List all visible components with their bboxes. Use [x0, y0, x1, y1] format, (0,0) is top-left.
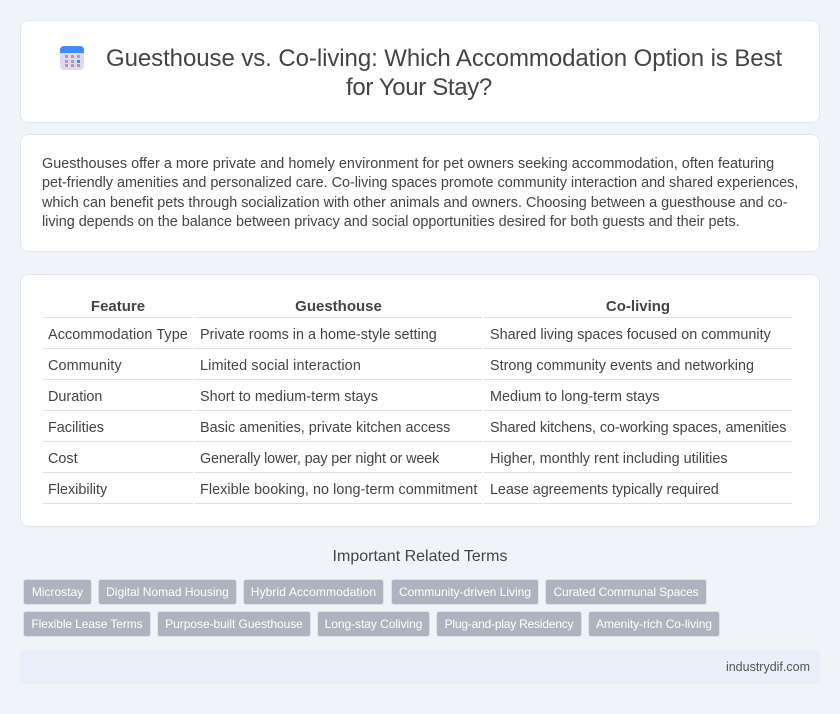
related terms tags: Long-stay Coliving — [325, 617, 422, 631]
comparison table: Lease agreements typically required — [490, 482, 719, 498]
related terms tags: Plug-and-play Residency — [445, 617, 573, 631]
footer bar — [20, 650, 820, 684]
header panel — [20, 20, 820, 123]
comparison table: Higher, monthly rent including utilities — [490, 451, 728, 467]
related terms tags: Curated Communal Spaces — [553, 585, 699, 599]
comparison table: Feature — [91, 298, 145, 315]
title — [106, 45, 782, 101]
intro text: living depends on the balance between privacy and social opportunities desired for both guests and their pets. — [42, 214, 740, 230]
source label: industrydif.com — [726, 660, 810, 674]
icon: calendar — [60, 46, 84, 70]
title: Guesthouse vs. Co-living: Which Accommodation Option is Best — [106, 45, 782, 72]
comparison table: Community — [48, 358, 122, 374]
comparison table: Shared kitchens, co-working spaces, amenities — [490, 420, 786, 436]
related terms tags — [23, 579, 720, 637]
comparison table: Limited social interaction — [200, 358, 361, 374]
comparison table panel — [20, 274, 820, 527]
comparison table: Flexibility — [48, 482, 107, 498]
comparison table: Co-living — [606, 298, 670, 315]
comparison table: Private rooms in a home-style setting — [200, 327, 437, 343]
intro text: pet-friendly amenities and personalized care. Co-living spaces promote community interaction and shared experiences, — [42, 175, 798, 191]
comparison table: Duration — [48, 389, 102, 405]
related terms tags: Purpose-built Guesthouse — [165, 617, 303, 631]
comparison table — [43, 298, 792, 504]
comparison table: Basic amenities, private kitchen access — [200, 420, 450, 436]
intro text: Guesthouses offer a more private and homely environment for pet owners seeking accommodation, often featuring — [42, 156, 774, 172]
intro text — [42, 156, 798, 230]
comparison table: Flexible booking, no long-term commitment — [200, 482, 477, 498]
related terms tags: Community-driven Living — [399, 585, 531, 599]
comparison table: Cost — [48, 451, 78, 467]
comparison table: Medium to long-term stays — [490, 389, 660, 405]
related terms tags: Digital Nomad Housing — [106, 585, 229, 599]
related terms tags: Microstay — [32, 585, 83, 599]
intro panel — [20, 134, 820, 252]
title: for Your Stay? — [346, 74, 492, 101]
comparison table: Short to medium-term stays — [200, 389, 378, 405]
intro text: which can benefit pets through socialization with other animals and owners. Choosing between a guesthouse and co- — [42, 195, 788, 211]
comparison table: Guesthouse — [295, 298, 382, 315]
comparison table: Strong community events and networking — [490, 358, 754, 374]
comparison table: Facilities — [48, 420, 104, 436]
related terms tags: Hybrid Accommodation — [251, 585, 376, 599]
comparison table: Generally lower, pay per night or week — [200, 451, 439, 467]
comparison table: Shared living spaces focused on community — [490, 327, 771, 343]
related terms tags: Amenity-rich Co-living — [596, 617, 712, 631]
comparison table: Accommodation Type — [48, 327, 188, 343]
related terms tags: Flexible Lease Terms — [31, 617, 143, 631]
related terms heading: Important Related Terms — [333, 548, 507, 565]
